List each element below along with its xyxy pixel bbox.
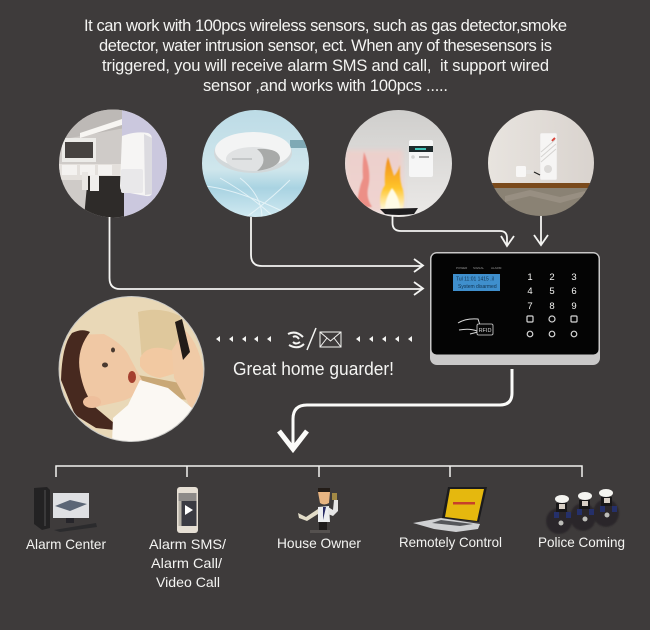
keypad bbox=[527, 272, 577, 312]
icon: phone call bbox=[288, 333, 304, 347]
sensor photo: motion detector bbox=[59, 109, 168, 218]
label: Police Coming: Police Coming bbox=[538, 534, 625, 550]
bracket bbox=[56, 466, 582, 477]
status labels: POWER bbox=[456, 266, 468, 270]
LCD display: Tul 11:01 1415 .il bbox=[456, 276, 494, 282]
LCD display: System disarmed bbox=[458, 284, 497, 290]
keypad function buttons bbox=[527, 316, 577, 337]
sensor photo: smoke detector bbox=[201, 109, 312, 219]
status labels bbox=[456, 266, 502, 270]
status labels: ALARM bbox=[491, 266, 502, 270]
label: Alarm SMS / Alarm Call / Video Call: Video Call bbox=[156, 574, 220, 590]
sensor photo: gas detector with fire bbox=[344, 109, 454, 219]
keypad: 8 bbox=[549, 301, 555, 312]
tagline: Great home guarder! bbox=[233, 359, 394, 379]
keypad: 2 bbox=[549, 272, 555, 283]
signal arrows left bbox=[216, 336, 271, 342]
alarm control panel bbox=[430, 252, 600, 365]
arrow: smoke detector to panel bbox=[251, 217, 423, 272]
big arrow: panel to responders bbox=[279, 369, 512, 449]
signal arrows right bbox=[356, 336, 412, 342]
intro text block: It can work with 100pcs wireless sensors, such as gas detector,smoke bbox=[84, 17, 567, 35]
RFID hand symbol: RFID bbox=[479, 328, 491, 334]
keypad: 9 bbox=[571, 301, 577, 312]
label: Alarm SMS / Alarm Call / Video Call: Alarm Call/ bbox=[151, 555, 222, 571]
keypad: 1 bbox=[527, 272, 533, 283]
label: Alarm SMS / Alarm Call / Video Call: Alarm SMS/ bbox=[149, 536, 226, 552]
intro text block bbox=[84, 17, 567, 95]
arrow: motion detector to panel bbox=[110, 217, 423, 295]
keypad: 3 bbox=[571, 272, 577, 283]
icon: phone with video bbox=[177, 487, 198, 533]
keypad: 6 bbox=[571, 286, 577, 297]
intro text block: detector, water intrusion sensor, ect. When any of thesesensors is bbox=[99, 37, 552, 55]
icon: alarm center computer bbox=[34, 487, 97, 532]
slash bbox=[307, 328, 316, 350]
keypad: 5 bbox=[549, 286, 555, 297]
sensor photo: door contact bbox=[487, 109, 595, 218]
status labels: SIGNAL bbox=[473, 266, 484, 270]
intro text block: sensor ,and works with 100pcs ..... bbox=[203, 77, 448, 95]
arrow: gas detector to panel bbox=[392, 215, 514, 246]
intro text block: triggered, you will receive alarm SMS and call, it support wired bbox=[102, 57, 549, 75]
icon: envelope bbox=[320, 332, 341, 347]
label: Remotely Control: Remotely Control bbox=[399, 534, 502, 550]
RFID hand symbol bbox=[458, 319, 493, 335]
photo: surprised woman with phone bbox=[58, 295, 206, 443]
label: Alarm SMS / Alarm Call / Video Call bbox=[149, 536, 226, 590]
icon: laptop bbox=[413, 487, 487, 532]
label: Alarm Center: Alarm Center bbox=[26, 536, 106, 552]
arrow: door contact to panel bbox=[534, 216, 548, 245]
label: House Owner: House Owner bbox=[277, 535, 361, 551]
fire base bbox=[380, 208, 418, 215]
LCD display bbox=[453, 274, 500, 291]
icon: house owner on phone bbox=[298, 488, 338, 533]
keypad: 4 bbox=[527, 286, 533, 297]
icon: police officers on motorbikes bbox=[546, 489, 619, 534]
photo ring bbox=[59, 296, 204, 442]
keypad: 7 bbox=[527, 301, 533, 312]
